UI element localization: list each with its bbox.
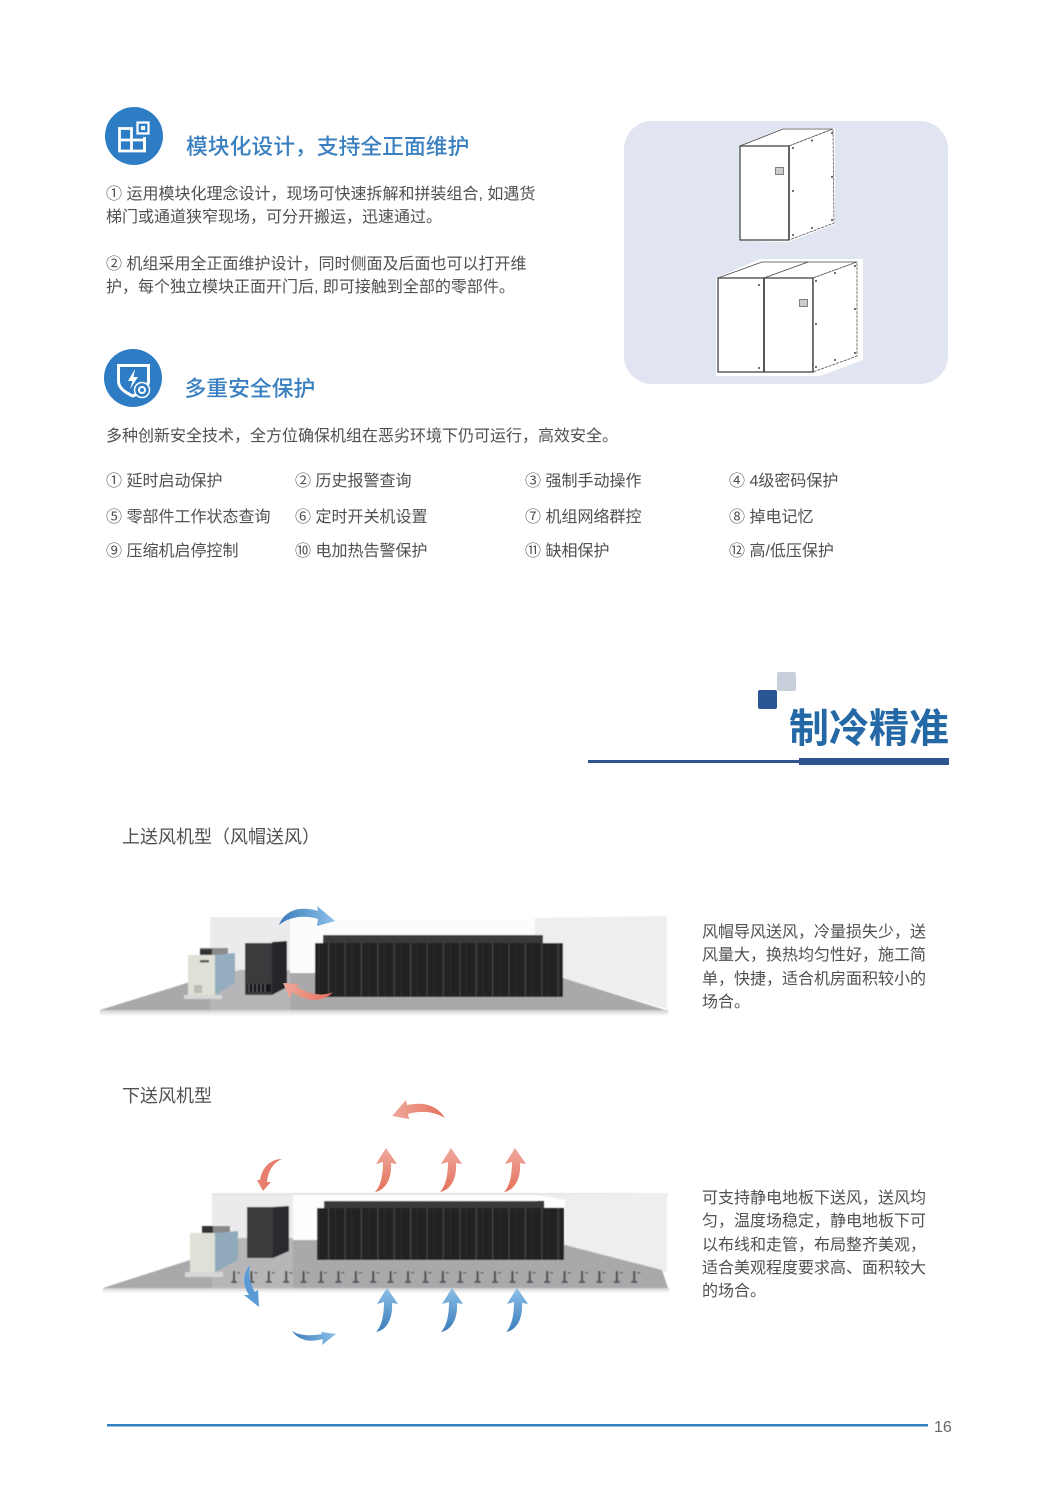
text block: modular paragraph 2 (106, 255, 526, 296)
arrow: red return air (283, 983, 333, 1000)
indoor cooling unit (245, 941, 287, 995)
panel: cabinet illustrations (624, 121, 948, 384)
room walls (210, 916, 667, 1009)
server racks (317, 1201, 564, 1260)
list: protection features: ⑪ 缺相保护 (525, 543, 609, 560)
text block: top supply description: 风帽导风送风，冷量损失少，送 (702, 924, 926, 941)
left glass wall overlay (210, 970, 290, 1010)
list: protection features: ⑫ 高/低压保护 (729, 543, 834, 560)
floor pedestals (228, 1270, 646, 1284)
list: protection features: ⑦ 机组网络群控 (525, 509, 641, 526)
text block: modular paragraph 2: ② 机组采用全正面维护设计，同时侧面及后面也可以打开维 (106, 256, 526, 273)
heading underline (588, 758, 949, 765)
text block: modular paragraph 1: 梯门或通道狭窄现场，可分开搬运，迅速通过。 (106, 209, 442, 226)
illustration: single cabinet (739, 128, 835, 242)
room floor (100, 970, 668, 1016)
indoor cooling unit (247, 1206, 289, 1258)
list: protection features: ① 延时启动保护 (106, 473, 222, 490)
list: protection features: ② 历史报警查询 (295, 473, 411, 490)
text block: top supply description: 单，快捷，适合机房面积较小的 (702, 971, 926, 988)
room walls (212, 1193, 668, 1272)
list: protection features: ⑧ 掉电记忆 (729, 509, 813, 526)
list: protection features: ③ 强制手动操作 (525, 473, 641, 490)
subheading: bottom supply: 下送风机型 (122, 1086, 212, 1106)
text block: top supply description: 场合。 (702, 994, 750, 1011)
heading: safety protection: 多重安全保护 (184, 376, 315, 401)
list: protection features: ⑨ 压缩机启停控制 (106, 543, 238, 560)
footer rule (107, 1424, 928, 1426)
diagram: top-supply room (100, 916, 668, 1016)
text block: bottom supply description: 匀，温度场稳定，静电地板下可 (702, 1213, 926, 1230)
text block: bottom supply description: 适合美观程度要求高、面积较大 (702, 1260, 926, 1277)
heading: modular design: 模块化设计，支持全正面维护 (186, 134, 469, 159)
icon: modular grid (105, 107, 163, 165)
outdoor unit (184, 948, 235, 999)
illustration: double cabinet (716, 259, 863, 376)
text block: modular paragraph 2: 护，每个独立模块正面开门后, 即可接触到全部的零部件。 (106, 279, 515, 296)
diagram: under-floor supply room (103, 1193, 669, 1293)
arrows: red rising air (375, 1148, 526, 1192)
list: protection features: ⑤ 零部件工作状态查询 (106, 509, 270, 526)
text block: modular paragraph 1: ① 运用模块化理念设计，现场可快速拆解和拼装组合, 如遇货 (106, 186, 535, 203)
text block: safety intro: 多种创新安全技术，全方位确保机组在恶劣环境下仍可运行，高效安全。 (106, 428, 618, 445)
section marker: decorative squares (758, 672, 796, 709)
arrow: blue under-floor bottom (292, 1331, 336, 1345)
text block: bottom supply description: 的场合。 (702, 1283, 766, 1300)
list: protection features: ④ 4级密码保护 (729, 473, 838, 490)
arrow: blue supply air (279, 906, 335, 926)
text block: bottom supply description (702, 1189, 926, 1300)
subheading: top supply: 上送风机型（风帽送风） (122, 827, 320, 847)
page number: 16 (934, 1419, 952, 1436)
arrow: blue under-floor left (244, 1265, 259, 1307)
list: protection features (106, 472, 838, 560)
text block: bottom supply description: 以布线和走管，布局整齐美观， (702, 1237, 926, 1254)
list: protection features: ⑩ 电加热告警保护 (295, 543, 427, 560)
server racks (315, 935, 563, 997)
icon: safety shield (104, 349, 162, 407)
text block: bottom supply description: 可支持静电地板下送风，送风均 (702, 1190, 926, 1207)
arrow: red return left (257, 1159, 282, 1191)
list: protection features: ⑥ 定时开关机设置 (295, 509, 427, 526)
left glass wall overlay (212, 1238, 293, 1288)
arrows: blue under-floor air (376, 1288, 528, 1332)
text block: top supply description (702, 923, 926, 1011)
section heading: precise cooling: 制冷精准 (789, 707, 949, 751)
room floor (103, 1238, 669, 1293)
text block: top supply description: 风量大，换热均匀性好，施工简 (702, 947, 926, 964)
arrow: red return top (392, 1100, 445, 1119)
text block: modular paragraph 1 (106, 185, 535, 226)
outdoor unit (185, 1226, 238, 1277)
